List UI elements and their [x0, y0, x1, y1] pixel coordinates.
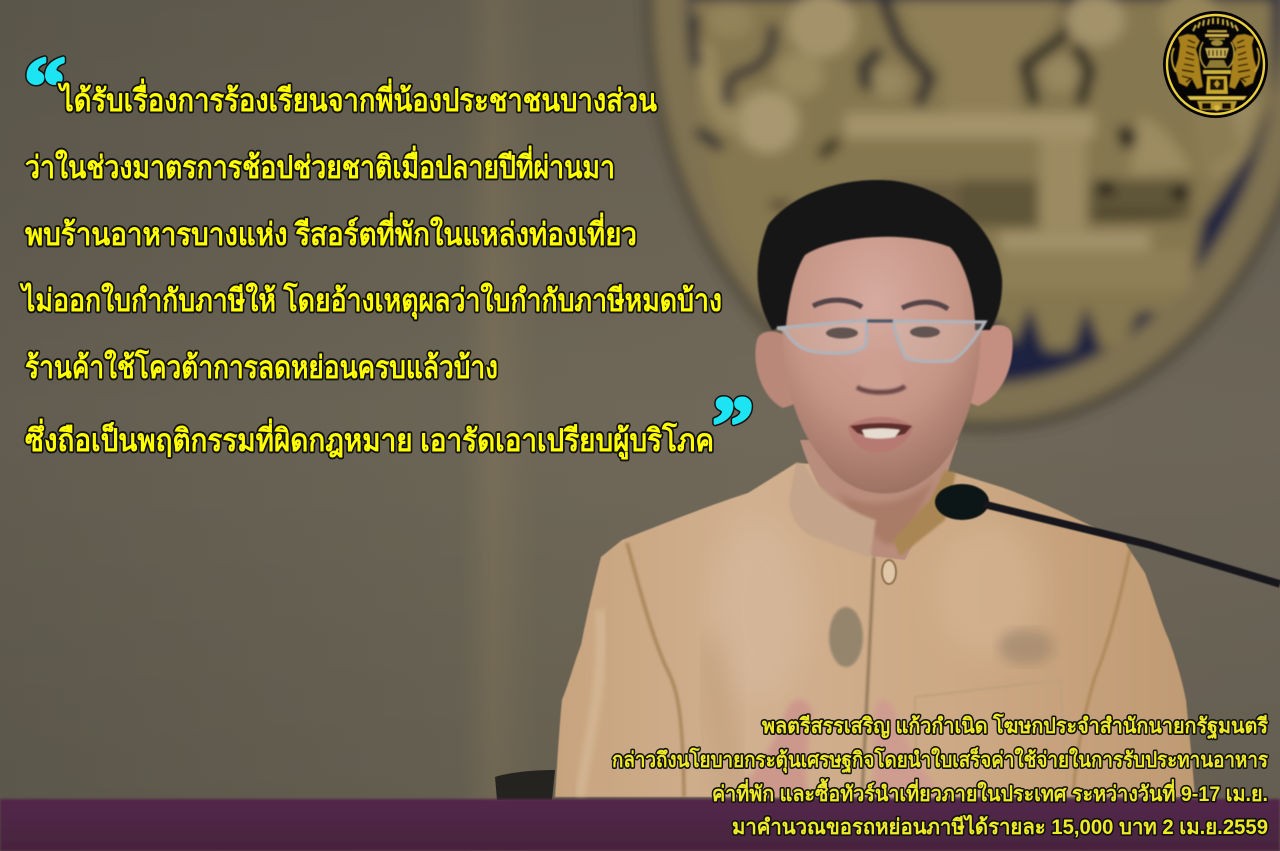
shadows on jacket: [829, 607, 863, 667]
logo urn lid: [1205, 30, 1229, 40]
government seal logo: [1163, 11, 1268, 118]
quote line 3: พบร้านอาหารบางแห่ง รีสอร์ตที่พักในแหล่งท่องเที่ยว: [25, 212, 637, 252]
quote line 6: ซึ่งถือเป็นพฤติกรรมที่ผิดกฎหมาย เอารัดเอาเปรียบผู้บริโภค: [25, 418, 714, 460]
logo flames: [1193, 18, 1238, 31]
closing quotation mark: ”: [712, 380, 754, 473]
hands: [735, 700, 942, 797]
table edge: [0, 799, 1280, 851]
hair: [757, 180, 1002, 330]
quote line 4: ไม่ออกใบกำกับภาษีให้ โดยอ้างเหตุผลว่าใบกำกับภาษีหมดบ้าง: [19, 282, 722, 320]
quote line 1: ได้รับเรื่องการร้องเรียนจากพี่น้องประชาชนบางส่วน: [57, 78, 657, 118]
chair back: [495, 770, 555, 800]
ears: [755, 325, 1013, 408]
nose: [857, 350, 905, 392]
jacket: [555, 440, 1195, 797]
blurred government seal on the wall: [645, 0, 1280, 431]
neck: [800, 440, 958, 560]
mouth: [848, 417, 913, 453]
jacket sheen and folds: [710, 520, 810, 700]
seal urn: [905, 0, 1055, 112]
eyebrows and eyes: [813, 300, 948, 338]
opening quotation mark: “: [24, 40, 66, 133]
quote line 2: ว่าในช่วงมาตรการช้อปช่วยชาติเมื่อปลายปีที่ผ่านมา: [25, 145, 615, 185]
logo right lion: [1229, 34, 1259, 89]
speaker portrait: [555, 180, 1195, 797]
logo pedestal: [1203, 70, 1231, 94]
left collar: [789, 463, 876, 558]
right collar: [893, 470, 956, 556]
caption line 4: มาคำนวณขอรถหย่อนภาษีได้รายละ 15,000 บาท 2 เม.ย.2559: [732, 814, 1268, 839]
logo left lion: [1172, 34, 1203, 89]
placket: [862, 557, 874, 797]
microphone: [935, 484, 1280, 584]
logo base: [1187, 96, 1247, 111]
closing quotation mark: ”: [712, 380, 754, 473]
logo bowl: [1200, 40, 1234, 68]
button: [882, 560, 896, 584]
quote line 5: ร้านค้าใช้โควต้าการลดหย่อนครบแล้วบ้าง: [25, 349, 498, 385]
seal ornaments: [737, 91, 799, 153]
caption text block: [612, 713, 1269, 839]
glasses: [777, 320, 985, 362]
quote text block: [19, 40, 754, 473]
face: [782, 229, 981, 493]
opening quotation mark: “: [24, 40, 66, 133]
pocket: [915, 680, 1068, 796]
